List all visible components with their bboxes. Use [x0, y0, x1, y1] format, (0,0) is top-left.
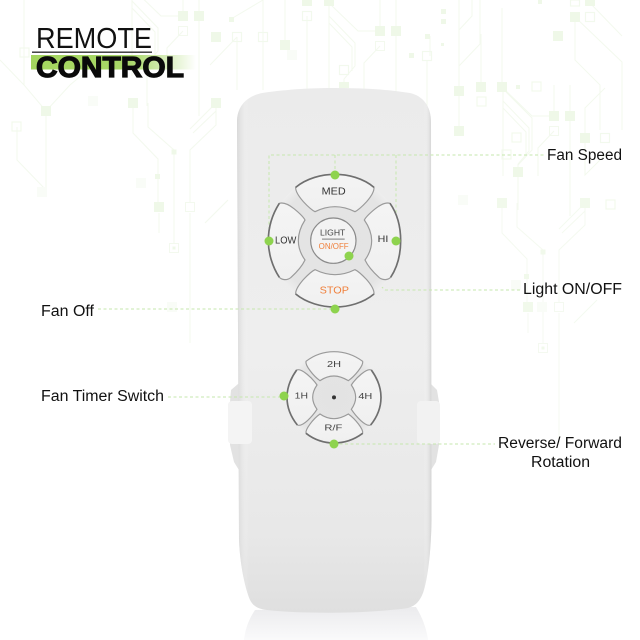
label: Fan Off: Fan Off	[41, 303, 95, 320]
label: Reverse/ Forward Rotation: Reverse/ Forward	[498, 435, 622, 452]
bottom button cluster	[287, 350, 381, 444]
title	[31, 23, 196, 84]
button: 1H: 1H	[295, 391, 308, 401]
button: LIGHT ON/OFF	[311, 218, 356, 263]
floor reflection	[244, 607, 428, 640]
title line: REMOTE: REMOTE	[36, 23, 152, 55]
label: Fan Speed: Fan Speed	[547, 147, 622, 164]
button: STOP: STOP	[320, 286, 349, 297]
button: LIGHT ON/OFF: LIGHT	[320, 229, 345, 238]
remote control body	[228, 88, 440, 613]
label: Reverse/ Forward Rotation: Rotation	[531, 454, 590, 471]
button: LOW: LOW	[275, 236, 297, 247]
body shell	[237, 88, 432, 613]
left clip	[228, 401, 252, 444]
button: HI: HI	[378, 234, 388, 244]
top button cluster	[268, 174, 401, 307]
green highlight bar	[31, 55, 196, 70]
indicator dot	[332, 395, 336, 399]
side clip wings	[230, 384, 439, 475]
right clip	[417, 401, 440, 444]
button: LIGHT ON/OFF: ON/OFF	[319, 242, 349, 251]
green callout dots	[264, 170, 400, 448]
button: 2H: 2H	[327, 359, 341, 369]
background circuit pattern	[0, 0, 622, 443]
button: 4H: 4H	[358, 391, 372, 401]
title underline	[32, 52, 152, 53]
title line: CONTROL: CONTROL	[36, 52, 184, 84]
label: Reverse/ Forward Rotation	[498, 435, 622, 471]
button: MED: MED	[322, 187, 346, 198]
button: R/F: R/F	[324, 423, 342, 433]
dashed leader lines	[98, 155, 546, 444]
label: Fan Timer Switch: Fan Timer Switch	[41, 388, 164, 405]
label: Light ON/OFF: Light ON/OFF	[523, 281, 622, 298]
